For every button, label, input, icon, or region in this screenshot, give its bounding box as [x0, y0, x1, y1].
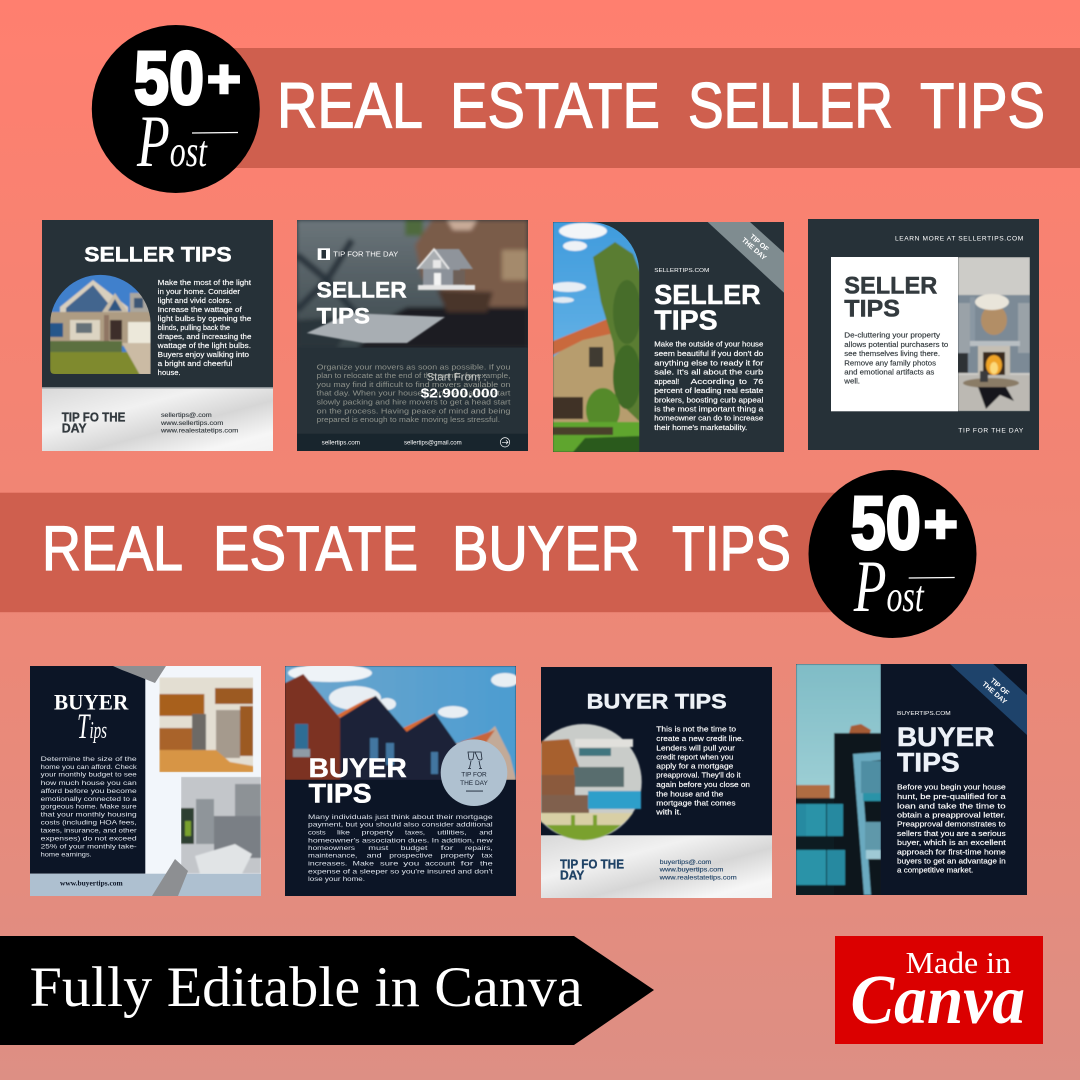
body text: prepared is enough to make moving less stressful.	[317, 417, 500, 424]
body text: approach for first-time home	[897, 847, 1006, 856]
body text: prospective	[389, 854, 434, 860]
body text: buyer, which is an excellent	[897, 838, 1006, 847]
body text: apply for a mortgage	[656, 762, 733, 771]
banner: real estate seller tips: ESTATE	[450, 70, 660, 142]
body text: drapes, and increasing the	[158, 332, 251, 341]
card title	[317, 278, 407, 328]
body text: create a new credit line.	[656, 734, 744, 743]
badge: 50+ post (seller): 50	[134, 36, 204, 120]
body text: afford before you become	[41, 788, 137, 795]
card title: TIPS	[317, 303, 370, 328]
body text: wattage of the light bulbs.	[157, 341, 251, 350]
card title: SELLER	[317, 278, 407, 303]
top caption: LEARN MORE AT SELLERTIPS.COM	[895, 235, 1023, 242]
body text: house.	[158, 368, 181, 377]
white panel	[831, 257, 958, 411]
card title: BUYER	[309, 753, 407, 783]
corner ribbon	[950, 664, 1027, 735]
body text	[41, 756, 138, 859]
clipboard	[307, 313, 445, 343]
body text: tax	[482, 854, 493, 860]
body text	[317, 364, 511, 424]
body text: blinds, pulling back the	[158, 323, 230, 332]
badge: made in canva: Canva	[850, 962, 1025, 1039]
body text: their home's marketability.	[654, 423, 747, 432]
card title: SELLER	[654, 279, 761, 310]
body text: slowly packing and hire movers to get a head start	[317, 399, 510, 406]
photo: living room with fireplace	[958, 257, 1030, 411]
body text: sale. It's all about the curb	[654, 368, 763, 377]
body text: seem beautiful if you don't do	[654, 349, 763, 358]
corner ribbon: TIP OF	[748, 233, 770, 254]
badge: 50+ post (buyer): 50	[851, 481, 921, 565]
body text: De-cluttering your property	[844, 331, 940, 340]
banner: real estate buyer tips: TIPS	[672, 514, 791, 584]
body text: repairs,	[465, 846, 493, 852]
footer text	[322, 439, 462, 446]
icon: arrow circle	[500, 438, 510, 447]
card: buyer tips 1	[30, 666, 261, 896]
card: buyer tips 2	[285, 664, 519, 896]
body text: your monthly budget to see	[41, 772, 137, 779]
photo: row of houses	[285, 664, 519, 780]
arrow banner: fully editable in canva	[0, 936, 654, 1045]
body text: expense of a sleeper so you're insured and don't	[308, 869, 493, 875]
body text: Determine the size of the	[41, 756, 137, 763]
card title: SELLER	[844, 272, 938, 299]
photo: villa with pool in circle	[541, 723, 643, 841]
body text: 25% of your monthly take-	[41, 844, 137, 851]
body text: budget	[401, 846, 428, 852]
corner ribbon: TIP OF	[989, 677, 1011, 698]
body text: the	[480, 862, 494, 868]
footer contacts	[659, 859, 737, 881]
tip-of-day circle: THE DAY	[460, 780, 489, 787]
body text: Remove any family photos	[844, 358, 936, 367]
card title	[844, 272, 938, 323]
body text: hunt, be pre-qualified for a	[897, 792, 1006, 801]
banner: real estate seller tips: SELLER	[688, 70, 893, 142]
tag line: TIP FOR THE DAY	[333, 249, 398, 258]
body text: Before you begin your house	[897, 783, 1006, 792]
body text: and emotional artifacts as	[844, 367, 935, 376]
icon: champagne glasses	[468, 752, 482, 768]
badge: 50+ post (seller): +	[207, 49, 241, 109]
body text: a competitive market.	[897, 866, 973, 875]
badge: 50+ post (buyer): +	[924, 494, 958, 554]
footer text: sellertips@gmail.com	[404, 439, 462, 446]
banner: real estate buyer tips: REAL	[42, 514, 183, 584]
body text	[654, 340, 764, 432]
body text: and	[367, 854, 382, 860]
body text: that your monthly housing	[41, 812, 137, 819]
tip-of-day circle	[441, 739, 507, 806]
body text: homeowners	[308, 846, 355, 852]
body text: buyers to get an advantage in	[897, 857, 1006, 866]
body text	[897, 783, 1006, 875]
card: seller tips 3	[550, 222, 784, 452]
body text: Make	[353, 862, 375, 868]
body text: on the process. Having peace of mind and being	[317, 408, 511, 415]
body text: credit report when you	[656, 752, 733, 761]
price overlay	[421, 372, 498, 400]
body text: lose your home.	[308, 877, 365, 883]
body text: see themselves living there.	[844, 349, 940, 358]
footer label: DAY	[560, 868, 585, 882]
body text	[843, 331, 948, 386]
corner ribbon: THE DAY	[980, 681, 1008, 706]
card title	[54, 690, 129, 746]
card title: TIPS	[309, 779, 372, 809]
banner: real estate buyer tips: BUYER	[452, 514, 640, 584]
body text: plan to relocate at the end of the month, for example,	[317, 373, 510, 380]
body text: again before you close on	[656, 780, 750, 789]
body text: gorgeous home. Make sure	[41, 804, 137, 811]
body text: sure	[380, 862, 399, 868]
body text: to	[739, 377, 747, 386]
photo: wood kitchen	[159, 677, 253, 772]
body text: and	[479, 831, 493, 837]
body text: anything else to ready it for	[654, 358, 764, 367]
footer label: TIP FO THE	[62, 410, 125, 424]
body text: is the most important thing a	[654, 405, 763, 414]
body text: obtain a preapproval letter.	[897, 811, 1006, 820]
body text: taxes, insurance, and other	[41, 828, 138, 835]
body text: percent of leading real estate	[654, 386, 763, 395]
card title: BUYER TIPS	[587, 690, 727, 713]
body text: expenses) do not exceed	[41, 836, 137, 843]
footer contacts: www.realestatetips.com	[160, 429, 238, 435]
card title: Tips	[77, 706, 107, 746]
body text: Many individuals just think about their mortgage	[308, 815, 494, 821]
badge: 50+ post (buyer): Post	[853, 546, 925, 628]
body text: Lenders will pull your	[656, 743, 736, 752]
footer label: TIP FO THE	[560, 857, 624, 871]
body text: According	[691, 377, 735, 386]
photo: house in arch	[50, 273, 151, 375]
body text: with it.	[655, 808, 682, 817]
body text: emotionally connected to a	[41, 796, 137, 803]
body text: taxes,	[405, 831, 425, 837]
body text: for	[441, 846, 453, 852]
body text: appeal!	[654, 377, 679, 386]
card: buyer tips 3	[526, 667, 772, 898]
badge: 50+ post (seller)	[92, 25, 260, 193]
body text: allows potential purchasers to	[844, 340, 948, 349]
body text: for	[461, 862, 473, 868]
footer label	[62, 410, 125, 436]
body text: light and vivid colors.	[158, 296, 232, 305]
body text: payment, but you should also consider additional	[308, 823, 493, 829]
card title: BUYER	[897, 722, 994, 752]
banner: real estate buyer tips	[0, 493, 880, 612]
body text: Organize your movers as soon as possible. If you	[317, 364, 511, 371]
body text: home you can afford. Check	[41, 764, 138, 771]
body text: like	[337, 831, 351, 837]
card: seller tips 2	[297, 220, 528, 451]
card title	[309, 753, 407, 809]
body text: mortgage that comes	[656, 799, 736, 808]
body text: Preapproval demonstrates to	[897, 820, 1006, 829]
icon: door logo	[318, 248, 330, 260]
banner: real estate seller tips: REAL	[277, 70, 423, 142]
body text: in your home. Consider	[158, 287, 241, 296]
banner: real estate seller tips	[220, 48, 1080, 168]
bottom caption: TIP FOR THE DAY	[958, 428, 1024, 435]
footer contacts: buyertips@.com	[660, 859, 711, 866]
body text: utilities,	[437, 831, 467, 837]
body text: property	[362, 831, 393, 837]
corner ribbon	[708, 222, 784, 293]
banner: real estate seller tips: TIPS	[920, 70, 1045, 142]
badge: made in canva	[835, 936, 1043, 1044]
website: www.buyertips.com	[60, 880, 123, 888]
footer label	[560, 857, 624, 882]
body text: you	[403, 862, 419, 868]
body text: brokers, boosting curb appeal	[654, 395, 764, 404]
body text: Make the outside of your house	[654, 340, 763, 349]
footer contacts: www.realestatetips.com	[659, 874, 737, 881]
body text: light bulbs by opening the	[158, 314, 251, 323]
body text: you may find it difficult to find movers available on	[317, 382, 511, 389]
body text: account	[425, 862, 455, 868]
body text	[655, 725, 750, 817]
card: buyer tips 4	[796, 664, 1027, 895]
body text: that day. When your house is on the market, start	[317, 391, 510, 398]
body text: preapproval. They'll do it	[656, 771, 741, 780]
card: seller tips 1	[42, 220, 273, 451]
footer contacts	[160, 413, 238, 435]
website label: SELLERTIPS.COM	[654, 268, 710, 274]
card title: TIPS	[897, 748, 960, 778]
body text: Make the most of the light	[158, 278, 251, 287]
body text: must	[368, 846, 389, 852]
body text: well.	[843, 377, 860, 386]
body text: how much house you can	[41, 780, 137, 787]
body text: costs	[308, 831, 326, 837]
card title: TIPS	[654, 304, 718, 335]
badge: made in canva: Made in	[906, 945, 1012, 980]
photo: hand holding model house	[297, 220, 528, 348]
icon: model house	[417, 249, 475, 290]
card title: BUYER	[54, 690, 129, 715]
body text: This is not the time to	[656, 725, 736, 734]
price overlay: $2.900.000	[421, 386, 498, 400]
body text	[308, 815, 494, 883]
body text: loan and take the time to	[897, 801, 1006, 810]
footer text: sellertips.com	[322, 439, 360, 446]
body text: homeowner's association dues. In addition, new	[308, 838, 494, 844]
card: seller tips 4	[808, 219, 1039, 450]
body text: Buyers enjoy walking into	[158, 350, 249, 359]
body text: 76	[753, 377, 763, 386]
tape pieces	[113, 666, 188, 896]
body text: homeowner can do to increase	[654, 414, 763, 423]
photo: grey kitchen	[181, 777, 261, 874]
tip-of-day circle: TIP FOR	[461, 771, 487, 778]
card title: SELLER TIPS	[84, 244, 232, 267]
badge: 50+ post (buyer)	[808, 470, 976, 638]
website label: BUYERTIPS.COM	[897, 711, 951, 717]
footer contacts: sellertips@.com	[161, 413, 212, 419]
card title	[654, 279, 761, 335]
body text: property	[441, 854, 474, 860]
badge: 50+ post (seller): Post	[136, 101, 208, 183]
footer contacts: www.buyertips.com	[659, 867, 723, 874]
body text: the house and the	[656, 789, 723, 798]
photo: modern building	[796, 664, 881, 895]
body text: Increase the wattage of	[158, 305, 242, 314]
arrow banner: fully editable in canva: Fully Editable in Canva	[30, 956, 583, 1019]
footer contacts: www.sellertips.com	[160, 421, 223, 427]
card title	[897, 722, 994, 778]
body text: a bright and cheerful	[158, 359, 233, 368]
body text: home earnings.	[41, 852, 92, 859]
body text: increases.	[308, 862, 348, 868]
price overlay: Start From :	[427, 372, 487, 384]
photo: house and tree in arch	[550, 222, 641, 452]
footer label: DAY	[62, 422, 87, 436]
body text	[157, 278, 251, 377]
corner ribbon: THE DAY	[740, 237, 767, 262]
body text: sellers that you are a serious	[897, 829, 1006, 838]
card title: TIPS	[844, 296, 900, 323]
body text: costs (including HOA fees,	[41, 820, 137, 827]
body text: maintenance,	[308, 854, 358, 860]
banner: real estate buyer tips: ESTATE	[213, 514, 418, 584]
